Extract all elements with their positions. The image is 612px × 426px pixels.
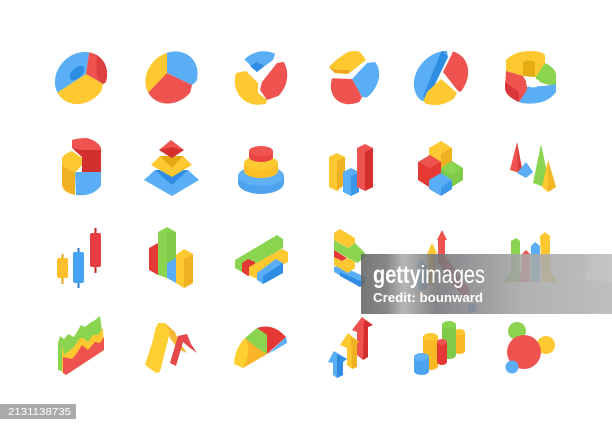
image id tag — [0, 404, 76, 419]
icon: stepped cylinder — [62, 138, 101, 195]
icon: isometric bar chart — [149, 227, 193, 288]
icon: candlestick chart — [57, 228, 101, 288]
icon: horizontal isometric bars — [235, 235, 288, 284]
icon: bubble chart — [506, 322, 555, 374]
icon: layered pyramid — [144, 140, 199, 196]
icon: cylinder chart — [414, 321, 465, 375]
icon: solid pie chart — [145, 51, 198, 104]
icon: isometric up arrows — [328, 317, 373, 378]
icon: upward arrow bars — [503, 232, 557, 282]
icon: stacked cylinders — [238, 146, 284, 194]
watermark logo text: gettyimages — [373, 261, 485, 289]
icon: exploded pie with lifted slice — [329, 51, 380, 104]
icon: cones and pyramids — [510, 142, 556, 192]
icon: rising curved arrows — [416, 230, 477, 313]
icon: half dome chart — [234, 327, 287, 368]
icon: ribbon chart — [145, 323, 197, 373]
icon: isometric bars — [329, 144, 373, 196]
icon: stacked block chart — [334, 229, 365, 287]
icon: layered area chart — [58, 316, 104, 375]
watermark banner — [361, 254, 612, 314]
icon: split pie with three pieces — [414, 50, 468, 106]
icon: donut chart — [54, 52, 108, 104]
icon: stacked cubes — [418, 141, 463, 196]
image id text: 2131138735 — [8, 406, 71, 418]
watermark credit text: Credit: bounward — [373, 290, 483, 305]
icon: stepped ring chart — [505, 51, 556, 104]
icon: exploded pie chart — [234, 51, 288, 105]
